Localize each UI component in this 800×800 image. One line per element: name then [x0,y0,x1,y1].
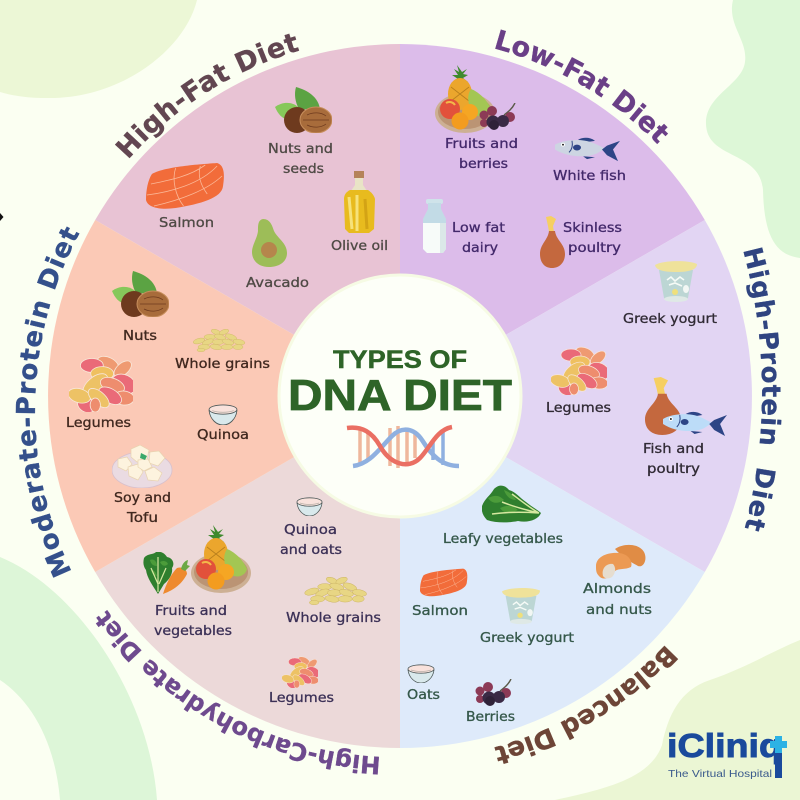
label: fruits and berries: Fruits and [445,137,518,152]
icon: legumes [66,353,139,416]
label: legumes: Legumes [269,691,334,706]
icon: quinoa bowl [209,405,237,425]
label: fruits and berries [445,137,518,172]
segment: moderate-protein wedge [48,220,400,572]
label: greek yogurt: Greek yogurt [623,312,717,327]
icon: berries [476,679,511,706]
label: soy and tofu: Soy and [114,491,171,506]
icon: drumstick [540,216,565,268]
logo q descender [775,745,782,778]
label: salmon: Salmon [159,216,214,231]
label: quinoa and oats [280,523,342,558]
segment: high-carbohydrate wedge [95,396,400,748]
background blob: bottom right [555,640,800,800]
label: skinless poultry: poultry [568,241,621,256]
icon: milk bottle [423,199,446,253]
icon: nuts [112,271,169,317]
panel: balanced diet [400,396,705,748]
background blob: top left [0,0,197,98]
icon: dna helix [347,426,459,468]
title: dna diet: DNA DIET [288,371,512,420]
label: low fat dairy [452,221,505,256]
icon: white fish [555,138,620,161]
label: almonds and nuts: and nuts [586,603,652,618]
panel: moderate-protein diet [48,220,400,572]
label: fruits and vegetables [154,604,232,639]
center badge [279,275,521,517]
icon: olive oil [344,171,375,233]
label: nuts and seeds: Nuts and [268,142,333,157]
label: greek yogurt: Greek yogurt [480,631,574,646]
label: leafy vegetables: Leafy vegetables [443,532,563,547]
label: almonds and nuts [583,582,652,618]
icon: avocado [252,219,287,267]
center circle [279,275,521,517]
icon: leafy vegetables [482,486,541,522]
icon: salmon [146,163,224,209]
icon: almonds [596,545,645,578]
label: white fish: White fish [553,169,626,184]
label: skinless poultry: Skinless [563,221,622,236]
label: avacado: Avacado [246,276,309,291]
background blob: top right [706,0,800,258]
label: quinoa: Quinoa [197,428,249,443]
label: berries: Berries [466,710,515,725]
icon: quinoa bowl [297,498,322,516]
logo plus [770,736,787,753]
label: salmon: Salmon [412,604,468,619]
segment: high-fat wedge [95,44,400,396]
label: olive oil: Olive oil [331,239,388,254]
label: soy and tofu [114,491,171,526]
icon: greek yogurt [655,261,697,302]
heading: high-carbohydrate diet: High-Carbohydrate Diet [96,610,379,775]
segment: balanced wedge [400,396,705,748]
panel: high-carbohydrate diet [95,396,400,748]
segment: high-protein wedge [400,220,752,572]
segment: low-fat wedge [400,44,705,396]
panel: high-protein diet [400,220,752,572]
logo tagline: The Virtual Hospital [668,768,772,780]
label: soy and tofu: Tofu [126,511,158,526]
icon: greek yogurt [502,588,540,624]
label: nuts and seeds [268,142,333,177]
label: fruits and berries: berries [459,157,508,172]
background blob: bottom left [0,557,157,800]
label: whole grains: Whole grains [286,611,381,626]
icon: oats bowl [408,665,434,683]
icon: fruits and berries [435,65,515,133]
heading: moderate-protein diet: Moderate-Protein Diet [16,226,80,578]
label: fish and poultry: poultry [647,462,700,477]
label: fish and poultry: Fish and [643,442,704,457]
heading: high-fat diet: High-Fat Diet [114,34,300,158]
panel: low-fat diet [400,44,705,396]
icon: fish and poultry [645,377,727,436]
label: fruits and vegetables: vegetables [154,624,232,639]
label: oats: Oats [407,688,440,703]
label: almonds and nuts: Almonds [583,582,651,597]
icon: whole grains [193,328,245,352]
label: quinoa and oats: and oats [280,543,342,558]
logo wordmark: iCliniq [667,727,782,764]
panel: high-fat diet [95,44,400,396]
label: nuts: Nuts [123,329,157,344]
label: low fat dairy: Low fat [452,221,505,236]
icon: salmon [420,569,467,596]
heading: low-fat diet: Low-Fat Diet [495,30,668,144]
heading: high-protein diet: High-Protein Diet [744,247,782,532]
label: fish and poultry [643,442,704,477]
heading: balanced diet: Balanced Diet [494,646,678,764]
title: types of: TYPES OF [333,346,467,374]
marker: small black diamond [0,213,4,221]
logo: icliniq [667,727,787,780]
icon: legumes [281,655,321,690]
icon: fruits and vegetables [143,525,251,594]
icon: soy and tofu [112,445,172,488]
icon: nuts and seeds [275,87,332,133]
label: nuts and seeds: seeds [283,162,324,177]
icon: whole grains [304,576,367,605]
label: skinless poultry [563,221,622,256]
label: legumes: Legumes [66,416,131,431]
label: fruits and vegetables: Fruits and [155,604,227,619]
label: legumes: Legumes [546,401,611,416]
label: whole grains: Whole grains [175,357,270,372]
label: low fat dairy: dairy [462,241,498,256]
icon: legumes [549,344,612,398]
label: quinoa and oats: Quinoa [284,523,337,538]
